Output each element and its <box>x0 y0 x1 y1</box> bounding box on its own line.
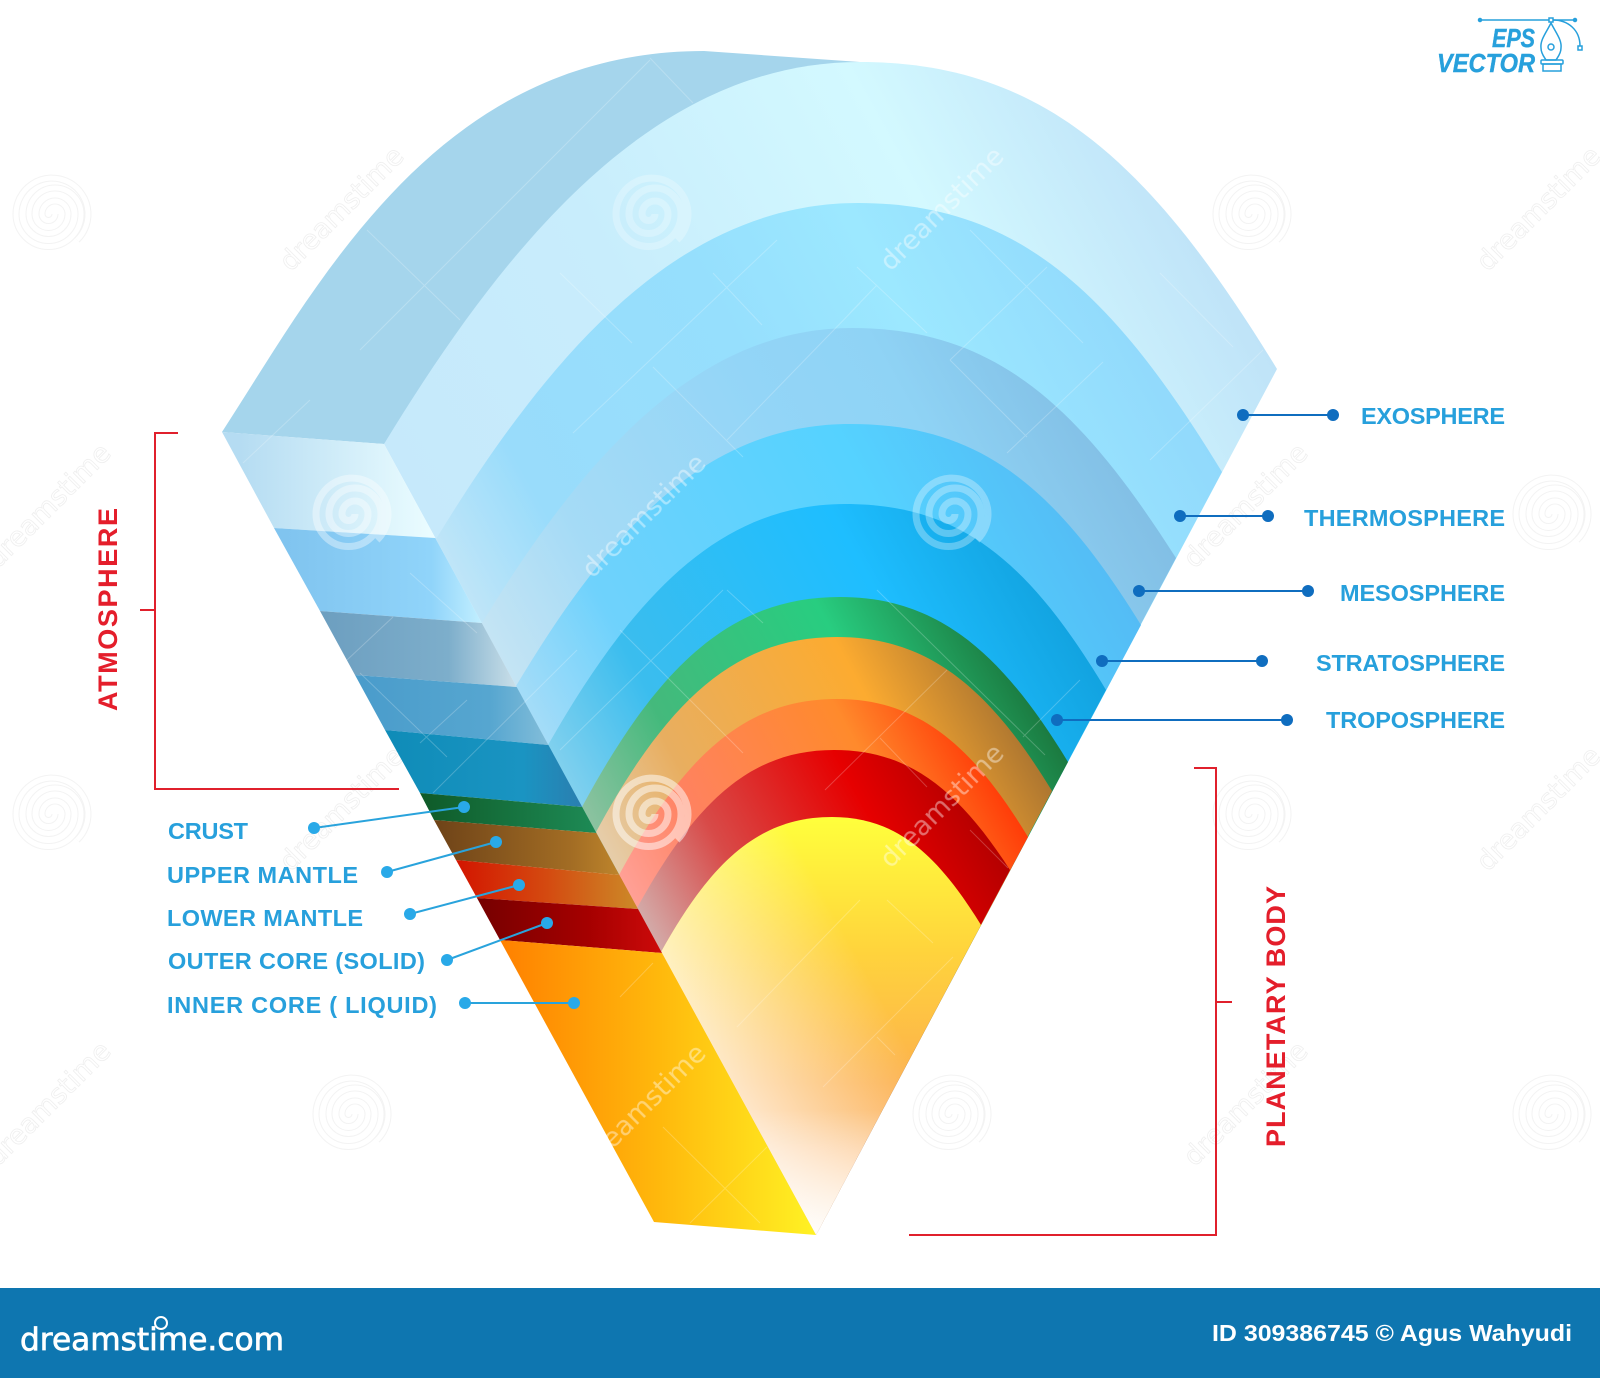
badge: EPS vector: VECTOR <box>1437 48 1535 78</box>
callout: stratosphere: STRATOSPHERE <box>1316 650 1505 676</box>
label: planetary body: PLANETARY BODY <box>1261 886 1291 1147</box>
callout: exosphere: EXOSPHERE <box>1361 403 1505 429</box>
footer bar <box>0 1288 1600 1378</box>
mesosphere band <box>482 328 1176 1235</box>
callout: outer core: OUTER CORE (SOLID) <box>168 948 425 974</box>
callout: exosphere <box>1237 403 1505 429</box>
bracket: atmosphere <box>140 433 399 789</box>
side face: cross-section strata <box>222 432 816 1235</box>
icon: pen nib <box>1478 18 1582 71</box>
outer core band <box>637 750 1010 1235</box>
watermark text over diagram: dreamstime <box>576 448 712 584</box>
callout: lower mantle: LOWER MANTLE <box>167 905 363 931</box>
watermark text over diagram <box>576 141 1010 1174</box>
callout: stratosphere <box>1096 650 1505 676</box>
background watermark: dreamstime text on white: dreamstime <box>1178 438 1314 574</box>
badge: EPS vector: EPS <box>1492 23 1536 53</box>
exosphere band <box>384 62 1277 1235</box>
callout: upper mantle <box>167 836 502 888</box>
inner core <box>661 817 981 1235</box>
callout: crust <box>168 801 470 844</box>
footer logo text: dreamstime.com <box>20 1322 284 1358</box>
background watermark: dreamstime text on white: dreamstime <box>274 141 410 277</box>
front face: layered arcs <box>384 62 1277 1235</box>
callout: troposphere: TROPOSPHERE <box>1326 707 1505 733</box>
callout: thermosphere <box>1174 505 1505 531</box>
thermosphere band <box>436 203 1222 1235</box>
callout: mesosphere: MESOSPHERE <box>1340 580 1505 606</box>
background watermark: spirals on white <box>16 178 1588 1147</box>
callout: thermosphere: THERMOSPHERE <box>1304 505 1505 531</box>
callout: upper mantle: UPPER MANTLE <box>167 862 358 888</box>
callout: inner core <box>167 992 580 1018</box>
callout: troposphere <box>1051 707 1505 733</box>
callout: mesosphere <box>1133 580 1505 606</box>
troposphere band <box>548 504 1106 1235</box>
badge: EPS vector <box>1437 18 1582 78</box>
top back face of the wedge <box>222 51 860 444</box>
background watermark: dreamstime text on white: dreamstime <box>274 741 410 877</box>
upper mantle band <box>596 637 1052 1235</box>
background watermark: dreamstime text on white <box>0 141 1600 1172</box>
callout: inner core: INNER CORE ( LIQUID) <box>167 992 437 1018</box>
bracket: planetary body <box>909 768 1232 1235</box>
watermark text over diagram: dreamstime <box>874 738 1010 874</box>
lower mantle band <box>619 699 1028 1235</box>
watermark text over diagram: dreamstime <box>576 1038 712 1174</box>
watermark spirals over diagram <box>316 178 988 847</box>
callout: crust: CRUST <box>168 818 249 844</box>
footer credit: ID 309386745 © Agus Wahyudi <box>1212 1320 1572 1346</box>
stratosphere band <box>516 424 1141 1235</box>
label: atmosphere: ATMOSPHERE <box>93 508 123 711</box>
icon: footer spiral <box>155 1317 167 1329</box>
watermark grid lines over diagram <box>243 58 1263 1223</box>
crust band <box>582 597 1068 1235</box>
watermark text over diagram: dreamstime <box>874 141 1010 277</box>
callout: lower mantle <box>167 879 525 931</box>
background watermark: dreamstime text on white: dreamstime <box>1178 1036 1314 1172</box>
callout: outer core <box>168 917 553 974</box>
